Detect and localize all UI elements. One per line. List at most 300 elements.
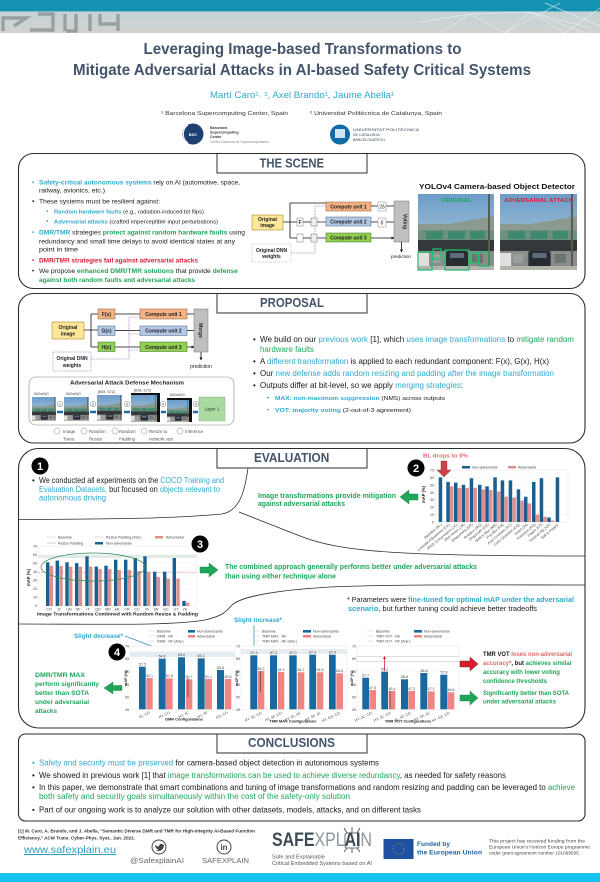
text block: scene bullets	[32, 180, 245, 284]
text block: scene bullets: •	[32, 180, 35, 186]
callout: mitigation: Image transformations provide mitigation	[258, 493, 396, 500]
bar chart: combined transformations: 20	[33, 587, 37, 591]
badge 2	[408, 460, 424, 476]
logo: BSC: Barcelona	[210, 126, 228, 130]
text block: conclusions bullets: Safety and security must be preserved for camera-based object detection in autonomous systems	[39, 758, 379, 768]
bar chart: combined transformations: SF	[76, 608, 81, 612]
bar chart: TMR VOT configurations: 58.8	[420, 669, 428, 673]
legend: defense steps	[54, 428, 204, 442]
icon: linkedin	[217, 840, 231, 854]
bar chart: single transformations: Salt & Pepper	[540, 522, 560, 540]
bar chart: TMR MAX configurations: 67.9	[329, 650, 336, 654]
bar chart: DMR configurations: HY, SF	[197, 710, 209, 719]
bar chart: DMR configurations: 55	[125, 683, 129, 687]
bar chart: TMR MAX configurations: 54.5	[336, 669, 343, 673]
text block: scene bullets: We propose enhanced DMR/TMR solutions that provide defense	[39, 268, 238, 275]
logo: BSC: BSC	[189, 132, 197, 137]
legend: TMR VOT	[367, 630, 450, 644]
legend: TMR MAX: TMR MAX - NF (Adv.)	[262, 640, 297, 644]
funding note: European Union's Horizon Europe programme	[489, 844, 591, 850]
logo: SAFEXPLAIN: Safe and Explainable	[272, 854, 325, 860]
bar chart: TMR VOT configurations: JC, SF, CO	[393, 711, 412, 723]
text block: proposal bullets: Outputs differ at bit-level, so we apply merging strategies:	[260, 381, 463, 390]
bar chart: TMR VOT configurations	[350, 630, 459, 724]
legend: chart 3: Adversarial	[166, 536, 184, 540]
bar chart: single transformations: JPEG Compression (JC)	[426, 523, 459, 551]
bar chart: single transformations: 30	[430, 498, 434, 502]
bar chart: TMR MAX configurations: 67.0	[290, 651, 296, 655]
bar chart: combined transformations: Image Transformations Combined with Random Resize & Padding	[37, 612, 198, 616]
arrow: green	[460, 691, 478, 705]
badge 3	[192, 536, 208, 552]
bar chart: single transformations: 50	[430, 484, 434, 488]
diagram: adversarial attack defense mechanism: [608, 672]	[98, 390, 115, 394]
bar chart: combined transformations: IT	[86, 608, 90, 612]
badge 4	[108, 644, 126, 660]
diagram: DMR/TMR voting: Compute unit 2	[330, 220, 367, 226]
bar chart: DMR configurations: HY, JC	[178, 711, 190, 719]
heading: conclusions	[217, 734, 367, 753]
bar chart: single transformations: Baseline (BL)	[424, 523, 443, 540]
authors: Martí Caro¹˒ ², Axel Brando¹, Jaume Abella¹	[210, 90, 394, 100]
bar chart: single transformations: Jitter-Noise (JN)	[443, 523, 466, 542]
heading: the scene	[217, 154, 367, 173]
bar chart: TMR MAX configurations: 67.3	[250, 651, 258, 655]
arrow: BL drop	[437, 461, 451, 477]
bar chart: DMR configurations: mAP (%)	[124, 670, 128, 686]
diagram: DMR/TMR voting: δ	[381, 220, 384, 226]
diagram: DMR/TMR voting: 2δ	[379, 204, 385, 210]
legend: TMR MAX: TMR MAX - NF	[262, 634, 287, 638]
bar chart: DMR configurations	[124, 630, 235, 722]
diagram: DMR/TMR voting	[252, 201, 411, 262]
legend: chart 2	[462, 466, 536, 470]
diagram: DMR/TMR voting: F	[298, 220, 302, 226]
arrow: DMR/TMR MAX	[104, 682, 122, 694]
bar chart: TMR MAX configurations: 55.2	[258, 667, 264, 671]
callout: TMR VOT: accuracy with lower voting	[483, 669, 560, 676]
legend: DMR: Non-adversarial	[197, 630, 223, 634]
bar chart: DMR configurations: 50	[125, 696, 129, 700]
bar chart: TMR MAX configurations: mAP (%)	[235, 670, 239, 686]
bar chart: TMR VOT configurations: 46.8	[448, 688, 454, 692]
diagram: image transformations: Merge	[197, 323, 203, 338]
diagram: image transformations: weights	[62, 363, 82, 369]
bar chart: single transformations: Fog Blur (FB)	[486, 523, 505, 540]
diagram: adversarial attack defense mechanism: Adversarial Attack Defense Mechanism	[70, 380, 184, 386]
funding note: This project has received funding from the	[489, 838, 586, 844]
callout: TMR VOT: under adversarial attacks	[483, 698, 557, 706]
diagram: adversarial attack defense mechanism: Layer 1	[205, 406, 220, 412]
bar chart: DMR configurations: 55.8	[217, 666, 224, 670]
logo: EU flag	[384, 839, 414, 859]
highlight ellipse	[41, 553, 145, 581]
legend: defense steps: network size	[149, 436, 174, 442]
text block: conclusions bullets: In this paper, we demonstrate that smart combinations and tuning of image transformations and random resizing and padding can be leveraged to achieve	[39, 783, 576, 792]
legend: DMR	[148, 630, 223, 644]
arrow: red	[460, 657, 478, 671]
diagram: image transformations: G(x)	[102, 328, 112, 334]
text block: proposal bullets: VOT: majority voting (2-out-of-3 agreement)	[275, 408, 411, 414]
badge 1	[32, 458, 48, 474]
panel: proposal	[18, 294, 585, 443]
callout: DMR/TMR MAX: perform significantly	[35, 681, 99, 688]
bar chart: TMR MAX configurations: HY, JC, CO	[244, 711, 263, 723]
legend: chart 2: Non-adversarial	[472, 466, 498, 470]
photo: original detection: ORIGINAL	[441, 198, 473, 204]
legend: defense steps: Resize	[89, 436, 103, 442]
callout: slight decrease	[74, 633, 176, 656]
bar chart: TMR VOT configurations: 57.8	[440, 670, 448, 674]
legend: chart 2: Adversarial	[518, 466, 536, 470]
callout: DMR/TMR MAX	[35, 672, 99, 715]
title: Leveraging Image-based Transformations to	[144, 41, 462, 58]
callout: mitigation	[258, 493, 396, 508]
bar chart: DMR configurations: 70	[125, 644, 129, 648]
diagram: adversarial attack defense mechanism: 4	[162, 402, 164, 406]
diagram: adversarial attack defense mechanism: [608, 672]	[134, 388, 151, 392]
bar chart: TMR VOT configurations: mAP (%)	[350, 670, 354, 686]
bar chart: single transformations: Sharpening (SP)	[451, 523, 474, 543]
diagram: adversarial attack defense mechanism: 3	[126, 402, 128, 406]
diagram: image transformations: Compute unit 3	[145, 345, 182, 351]
callout: combined approach	[225, 564, 477, 580]
bar chart: combined transformations: GC	[163, 608, 169, 612]
callout: slight increase	[234, 617, 283, 652]
text block: proposal bullets: We build on our previous work [1], which uses image transformations to mitigate random	[260, 335, 574, 344]
logo: BSC	[182, 124, 269, 144]
bar chart: single transformations: Vertical Flip (VF)	[529, 523, 552, 543]
bar chart: DMR configurations: 51.1	[205, 675, 212, 679]
callout: DMR/TMR MAX: better than SOTA	[35, 690, 89, 697]
legend: DMR: Adversarial	[197, 634, 215, 638]
text block: proposal bullets: •	[253, 335, 256, 344]
funded by: Funded by	[417, 841, 450, 848]
bar chart: TMR MAX configurations: HY, GS, CO	[321, 711, 341, 723]
panel: evaluation	[18, 448, 585, 728]
callout: mitigation: against adversarial attacks	[258, 501, 345, 508]
bar chart: TMR VOT configurations: HY, JC, CO	[373, 711, 392, 723]
bar chart: single transformations: Rotation (RO)	[463, 523, 483, 540]
photo: adversarial attack	[500, 194, 577, 270]
legend: TMR MAX: Non-adversarial	[313, 630, 339, 634]
bar chart: single transformations: Color Quantize (CQ)	[493, 523, 521, 547]
diagram: image transformations: image	[61, 332, 75, 338]
bar chart: TMR MAX configurations: 54.7	[298, 668, 304, 672]
bar chart: TMR MAX configurations: 45	[236, 708, 240, 712]
logo: SAFEXPLAIN	[272, 827, 372, 867]
legend: defense steps: Resize to	[149, 429, 168, 434]
text block: scene bullets: •	[32, 268, 35, 275]
text block: datasets: •	[32, 476, 35, 485]
text block: conclusions bullets: •	[32, 771, 35, 780]
bar chart: TMR MAX configurations: TMR MAX Configurations	[270, 718, 316, 724]
text block: scene bullets: point in time	[39, 246, 78, 254]
text block: proposal bullets: A different transformation is applied to each redundant component: F(x), G(x), H(x)	[260, 357, 549, 366]
legend: chart 3: Baseline	[58, 536, 72, 540]
text block: datasets	[32, 476, 224, 502]
text block: proposal bullets	[253, 335, 574, 414]
bar chart: single transformations: Elastic (ET)	[527, 523, 544, 538]
diagram: image transformations: F(x)	[102, 312, 111, 318]
callout: TMR VOT: TMR VOT loses non-adversarial	[483, 651, 572, 658]
bar chart: combined transformations: MD	[105, 608, 111, 612]
legend: TMR VOT: TMR VOT - NF	[376, 634, 401, 638]
legend: defense steps: Random	[119, 429, 136, 434]
heading: YOLOv4 detector: YOLOv4 Camera-based Object Detector	[419, 182, 575, 191]
text block: datasets: autonomous driving	[39, 494, 106, 502]
bar chart: single transformations: 0	[432, 520, 434, 524]
bar chart: TMR VOT configurations: 56.8	[401, 675, 408, 679]
text block: scene bullets: •	[46, 218, 49, 226]
icon: twitter	[152, 840, 166, 854]
bar chart: combined transformations: CO	[46, 608, 52, 612]
bar chart: TMR MAX configurations: 54.9	[278, 668, 284, 672]
text block: scene bullets: •	[46, 208, 49, 216]
photo: original detection	[418, 194, 494, 270]
reference: [1] M. Caro, A. Brando, and J. Abella, "Semantic Diverse DMR and TMR for High-Integrity AI-Based Function	[18, 828, 255, 834]
legend: TMR VOT: Non-adversarial	[424, 630, 450, 634]
bar chart: TMR MAX configurations: HY, SF, CO	[264, 711, 283, 723]
bar chart: DMR configurations: 51.8	[166, 674, 173, 678]
legend: TMR MAX: Adversarial	[313, 634, 331, 638]
bar chart: single transformations: Posterize (PO)	[516, 523, 537, 541]
logo: UPC: UNIVERSITAT POLITÈCNICA	[353, 127, 420, 132]
legend: TMR MAX	[253, 630, 339, 644]
text block: conclusions bullets	[32, 758, 576, 814]
bar chart: single transformations: 10	[430, 513, 434, 517]
funded by	[417, 841, 482, 856]
bar chart: DMR configurations: 45	[125, 708, 129, 712]
callout: DMR/TMR MAX: DMR/TMR MAX	[35, 672, 85, 679]
bar chart: single transformations: Contrast Adjustment (CA)	[417, 523, 451, 552]
legend: TMR VOT: Baseline	[376, 630, 390, 634]
funding note: under grant agreement number 101069595.	[489, 850, 580, 856]
bar chart: DMR configurations: 57.5	[139, 662, 146, 666]
text block: scene bullets: Random hardware faults (e.g., radiation-induced bit flips)	[54, 210, 204, 216]
bar chart: TMR MAX configurations: 54.8	[316, 668, 324, 672]
note: parameters	[347, 595, 574, 613]
bar chart: combined transformations: SR	[154, 608, 159, 612]
callout: DMR/TMR MAX: under adversarial	[35, 699, 89, 706]
legend: TMR MAX: Baseline	[262, 630, 276, 634]
bar chart: combined transformations: 40	[33, 570, 37, 574]
diagram: image transformations: Compute unit 2	[145, 328, 182, 334]
bar chart: TMR VOT configurations: 47.5	[369, 686, 376, 690]
legend: defense steps: Trans.	[63, 436, 75, 442]
bar chart: combined transformations: 70	[33, 544, 37, 548]
diagram: adversarial attack defense mechanism: 640x640	[34, 392, 49, 396]
logo: UPC: BARCELONATECH	[353, 138, 385, 142]
callout: TMR VOT	[483, 651, 573, 706]
bar chart: combined transformations: UN	[66, 608, 72, 612]
text block: conclusions bullets: •	[32, 758, 35, 768]
affiliations: ² Universitat Politècnica de Catalunya, Spain	[310, 111, 442, 117]
legend: defense steps: Random	[89, 429, 106, 434]
badge 1: 1	[37, 461, 43, 473]
bar chart: TMR VOT configurations: 59.2	[381, 668, 388, 672]
text block: scene bullets: •	[32, 230, 35, 236]
arrow: combined approach	[200, 563, 218, 577]
bar chart: TMR VOT configurations: 47.2	[408, 687, 415, 691]
bar chart: single transformations: 40	[430, 491, 434, 495]
bar chart: TMR VOT configurations: 55	[352, 683, 356, 687]
text block: proposal bullets: hardware faults	[260, 345, 314, 354]
bar chart: DMR configurations: HY, CO	[158, 711, 171, 719]
diagram: DMR/TMR voting: Compute unit 1	[330, 204, 367, 210]
panel: the scene	[18, 154, 585, 288]
heading: proposal: PROPOSAL	[260, 296, 324, 310]
text block: scene bullets: •	[32, 258, 35, 264]
reference: Efficiency," ACM Trans. Cyber-Phys. Syst., Jan. 2022.	[18, 836, 135, 840]
text block: proposal bullets: •	[253, 357, 256, 366]
bar chart: combined transformations: 0	[35, 604, 37, 608]
logo: BSC: Centro Nacional de Supercomputación	[210, 140, 269, 144]
bar chart: single transformations: Grayscale (GS)	[468, 523, 490, 542]
text block: scene bullets: DMR/TMR strategies protect against random hardware faults using	[39, 230, 245, 236]
diagram: image transformations: Original DNN	[56, 356, 88, 362]
legend: defense steps: Image	[63, 429, 76, 434]
bar chart: combined transformations: 10	[33, 596, 37, 600]
bar chart: DMR configurations: 60	[125, 670, 129, 674]
badge 3: 3	[197, 539, 203, 551]
top banner	[0, 0, 600, 33]
bar chart: TMR MAX configurations: 67.4	[309, 650, 316, 654]
title: Mitigate Adversarial Attacks in AI-based Safety Critical Systems	[73, 62, 531, 79]
diagram: image transformations: H(x)	[102, 345, 112, 351]
diagram: DMR/TMR voting: weights	[261, 254, 281, 260]
bar chart: TMR VOT configurations: 70	[352, 644, 356, 648]
diagram: adversarial attack defense mechanism: 2	[92, 402, 94, 406]
note: parameters: * Parameters were fine-tuned for optimal mAP under the adversarial	[347, 595, 574, 604]
bar chart: TMR MAX configurations: 70	[236, 644, 240, 648]
bar chart: DMR configurations: 65	[125, 657, 129, 661]
bar chart: DMR configurations: 64.8	[158, 654, 166, 658]
bar chart: DMR configurations: 50.7	[186, 675, 192, 679]
text block: scene bullets: These systems must be resilient against:	[39, 198, 160, 206]
legend: DMR: DMR - NF (Adv.)	[157, 640, 183, 644]
bar chart: TMR VOT configurations: HY, GS, CO	[431, 711, 451, 723]
social handles	[130, 858, 249, 865]
diagram: adversarial attack defense mechanism: 640x640	[170, 393, 185, 397]
arrow: mitigation	[400, 490, 418, 504]
callout: BL drops to 0%: BL drops to 0%	[423, 454, 468, 460]
diagram: image transformations: Compute unit 1	[145, 312, 182, 318]
text block: conclusions bullets: •	[32, 806, 35, 814]
diagram: adversarial attack defense mechanism: 5	[195, 402, 197, 406]
bar chart: single transformations: Auto Contrast (AC)	[487, 523, 513, 545]
heading: conclusions: CONCLUSIONS	[248, 736, 335, 750]
callout: TMR VOT: accuracy*, but achieves similar	[483, 660, 573, 667]
logo: BSC: Supercomputing	[210, 130, 239, 134]
diagram: DMR/TMR voting: Compute unit 3	[330, 236, 367, 242]
diagram: image transformations: Original	[59, 325, 78, 331]
bar chart: combined transformations: 30	[33, 578, 37, 582]
text block: proposal bullets: •	[267, 407, 270, 414]
text block: scene bullets: Safety-critical autonomous systems rely on AI (automotive, space,	[39, 180, 240, 186]
note: parameters: scenario, but further tuning could achieve better tradeoffs	[348, 604, 537, 613]
bar chart: combined transformations	[26, 536, 198, 616]
bar chart: TMR VOT configurations: 57.7	[362, 674, 369, 678]
diagram: adversarial attack defense mechanism: 640x640	[66, 392, 81, 396]
bar chart: combined transformations: AR	[114, 608, 120, 612]
bar chart: DMR configurations: JC, CO	[138, 711, 151, 719]
bar chart: TMR VOT configurations: HY, SF, JC	[413, 711, 431, 722]
social handles: SAFEXPLAIN	[202, 858, 249, 865]
affiliations: ¹ Barcelona Supercomputing Center, Spain	[161, 111, 288, 117]
text block: conclusions bullets: •	[32, 783, 35, 792]
bar chart: DMR configurations: 65.6	[178, 653, 185, 657]
text block: proposal bullets: •	[267, 395, 270, 402]
logo: SAFEXPLAIN: Critical Embedded Systems based on AI	[272, 861, 372, 867]
text block: scene bullets: •	[32, 198, 35, 206]
diagram: adversarial attack defense mechanism	[29, 377, 234, 425]
social handles: @SafexplainAI	[130, 858, 184, 865]
callout: slight decrease: Slight decrease*	[74, 633, 123, 640]
bar chart: combined transformations: CU	[134, 608, 140, 612]
heading: proposal	[217, 294, 367, 313]
bar chart: single transformations: Motion Blur (MB)	[474, 523, 498, 543]
legend: DMR: DMR - NF	[157, 634, 174, 638]
legend: defense steps: Padding	[119, 436, 136, 442]
bar chart: TMR VOT configurations: 65	[352, 657, 356, 661]
heading: evaluation: EVALUATION	[254, 451, 329, 465]
icon: linkedin: in	[220, 843, 228, 852]
text block: scene bullets: against both random faults and adversarial attacks	[39, 277, 195, 284]
text block: proposal bullets: •	[253, 369, 256, 378]
diagram: image transformations	[52, 309, 212, 371]
text block: datasets: We conducted all experiments on the COCO Training and	[39, 476, 224, 485]
bar chart: TMR MAX configurations: 60	[236, 670, 240, 674]
bar chart: TMR MAX configurations: 65	[236, 657, 240, 661]
bar chart: DMR configurations: GS, CO	[215, 711, 229, 720]
bar chart: DMR configurations: 50.6	[224, 675, 232, 679]
bar chart: TMR VOT configurations: 50	[352, 696, 356, 700]
heading: the scene: THE SCENE	[260, 156, 324, 170]
legend: chart 3: Non-adversarial	[106, 542, 132, 546]
text block: conclusions bullets: Part of our ongoing work is to analyze our solution with other datasets, models, attacks, and on different tasks	[39, 806, 421, 814]
legend: TMR VOT: Adversarial	[424, 634, 442, 638]
text block: proposal bullets: MAX: non-maximum suppression (NMS) across outputs	[275, 396, 445, 402]
legend: TMR VOT: TMR VOT - NF (Adv.)	[376, 640, 410, 644]
bar chart: TMR MAX configurations: 50	[236, 696, 240, 700]
footer band	[0, 873, 600, 882]
text block: scene bullets: DMR/TMR strategies fail against adversarial attacks	[39, 258, 198, 264]
funding note	[489, 838, 591, 856]
bar chart: TMR MAX configurations: HY, JC, SF	[284, 711, 302, 722]
bar chart: combined transformations: QD	[95, 608, 101, 612]
photo: adversarial attack: ADVERSARIAL ATTACK	[504, 198, 573, 204]
bar chart: TMR MAX configurations	[235, 630, 347, 724]
bar chart: TMR MAX configurations: HY, SF, JC	[304, 711, 322, 722]
bar chart: single transformations: mAP (%)	[421, 485, 426, 503]
legend: chart 3: Resize Padding	[58, 542, 83, 546]
callout: DMR/TMR MAX: attacks	[35, 708, 57, 715]
bar chart: combined transformations: mAP (%)	[26, 568, 31, 586]
text block: datasets: Evaluation Datasets, but focused on objects relevant to	[39, 485, 220, 494]
heading: evaluation	[217, 448, 367, 468]
text block: scene bullets: railway, avionics, etc.)	[39, 188, 105, 194]
bar chart: combined transformations: CR	[124, 608, 130, 612]
callout: TMR VOT: confidence thresholds	[483, 678, 548, 685]
bar chart: DMR configurations: DMR Configurations	[165, 716, 203, 722]
bar chart: TMR VOT configurations: 60	[352, 670, 356, 674]
diagram: DMR/TMR voting: Voting	[402, 214, 408, 229]
legend: defense steps: Inference	[185, 429, 204, 434]
bar chart: single transformations: Invert (IN)	[514, 523, 529, 536]
callout: TMR VOT: Significantly better than SOTA	[483, 690, 570, 697]
bar chart: TMR VOT configurations: 45.4	[388, 687, 396, 691]
